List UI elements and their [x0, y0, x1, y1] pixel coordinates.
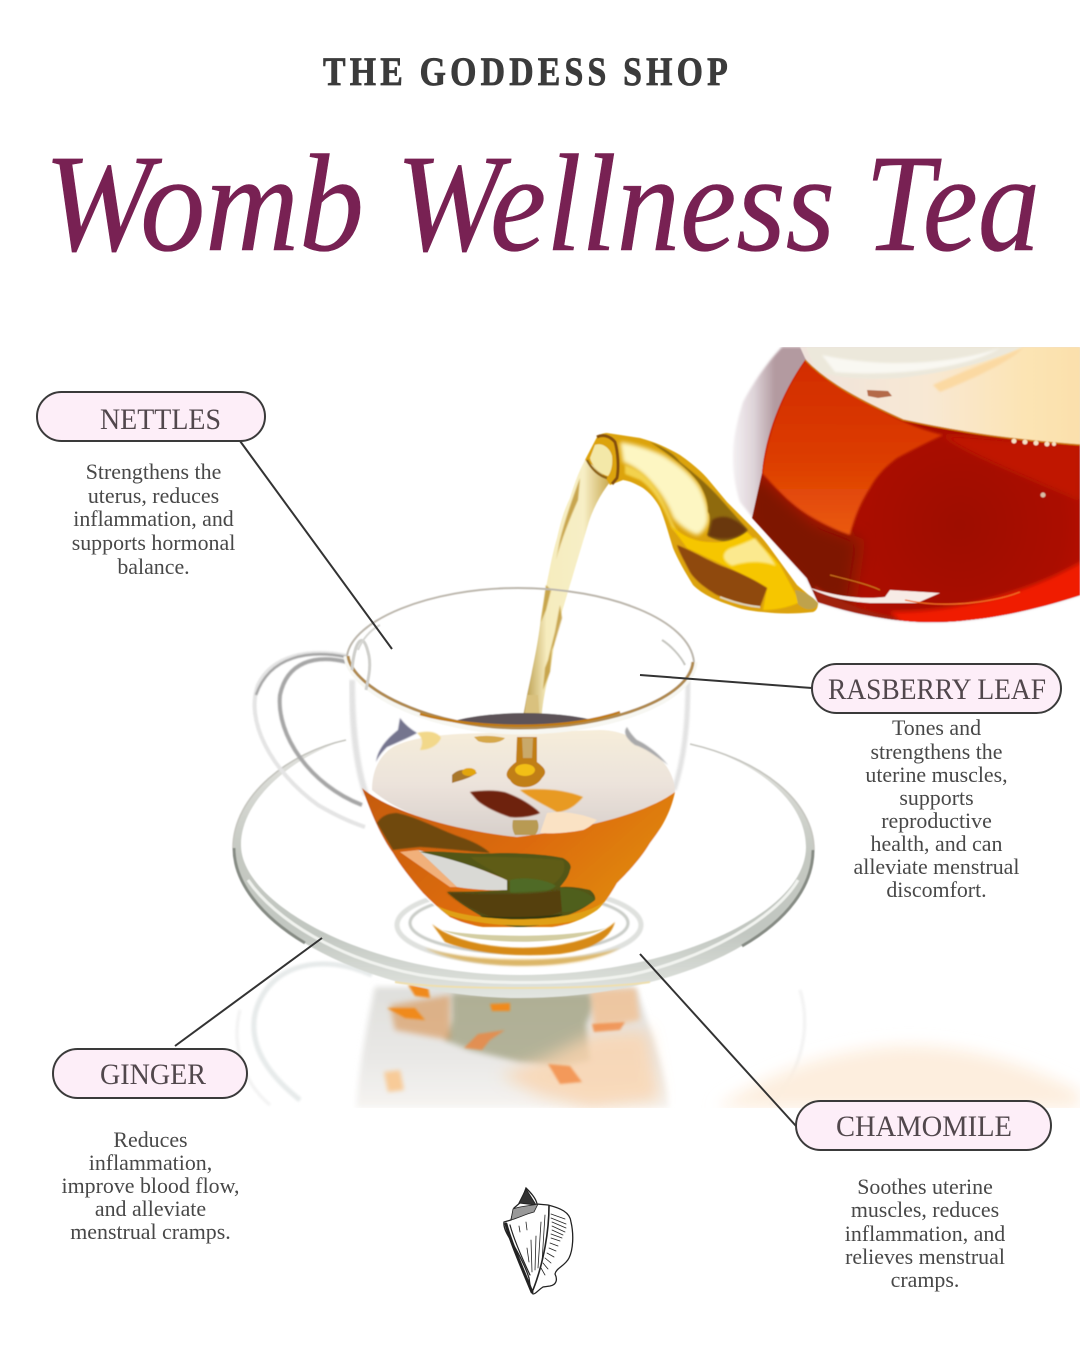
cup foot — [397, 887, 641, 966]
text: chamomile description: inflammation, and — [845, 1221, 1005, 1246]
label: nettles: NETTLES — [100, 403, 221, 436]
text: ginger description: inflammation, — [89, 1150, 212, 1175]
title: Wellness — [396, 127, 835, 281]
text: raspberry leaf description: strengthens the — [871, 739, 1002, 764]
amber foot of tea — [436, 898, 607, 926]
text: raspberry leaf description: discomfort. — [886, 877, 987, 902]
title — [44, 127, 1040, 281]
text: raspberry leaf description: supports — [899, 785, 974, 810]
label: raspberry leaf — [812, 664, 1061, 713]
connector: chamomile — [640, 954, 796, 1126]
orange strip and glare behind leaf — [400, 850, 457, 887]
text: nettles description: uterus, reduces — [88, 483, 219, 508]
connector: ginger — [175, 938, 322, 1046]
dark swirl and splash — [470, 791, 540, 817]
text: ginger description: Reduces — [113, 1127, 188, 1152]
connector: nettles — [240, 441, 392, 649]
mint leaf — [420, 852, 595, 927]
label: ginger — [53, 1049, 247, 1098]
text: ginger description: and alleviate — [95, 1196, 206, 1221]
text: raspberry leaf description: health, and can — [871, 831, 1002, 856]
text: nettles description: balance. — [117, 554, 190, 579]
text: chamomile description: muscles, reduces — [851, 1197, 999, 1222]
cup glass body — [350, 670, 692, 927]
text: raspberry leaf description: reproductive — [881, 808, 992, 833]
text: chamomile description: cramps. — [891, 1267, 959, 1292]
cup handle — [255, 653, 365, 827]
text: ginger description: improve blood flow, — [62, 1173, 239, 1198]
label: ginger: GINGER — [100, 1058, 206, 1091]
icon: conch shell — [504, 1188, 573, 1294]
teapot — [733, 347, 1080, 640]
text: nettles description: inflammation, and — [73, 506, 234, 531]
pouring stream — [507, 460, 610, 787]
saucer — [233, 740, 814, 998]
title: Womb — [44, 127, 364, 281]
label: chamomile — [796, 1101, 1051, 1150]
text: raspberry leaf description: uterine muscles, — [865, 762, 1008, 787]
label: nettles — [37, 392, 265, 441]
text: chamomile description: Soothes uterine — [857, 1174, 993, 1199]
label: raspberry leaf: RASBERRY LEAF — [828, 673, 1046, 706]
text: ginger description: menstrual cramps. — [70, 1219, 231, 1244]
cup rim — [347, 588, 694, 731]
reflection on table — [237, 964, 1080, 1108]
text: chamomile description: relieves menstrual — [845, 1244, 1005, 1269]
label: chamomile: CHAMOMILE — [836, 1110, 1012, 1143]
title: Tea — [865, 127, 1040, 281]
photo: tea pouring from glass teapot into cup — [233, 347, 1080, 1108]
teapot spout — [585, 433, 818, 614]
text: nettles description: supports hormonal — [72, 530, 235, 555]
water surface glints — [376, 718, 668, 783]
tea in cup — [355, 730, 685, 930]
connector: raspberry leaf — [640, 675, 812, 688]
brand heading: THE GODDESS SHOP — [323, 49, 732, 94]
text: nettles description: Strengthens the — [86, 459, 221, 484]
text: raspberry leaf description: alleviate menstrual — [854, 854, 1019, 879]
leaf, upper left — [377, 813, 490, 853]
text: raspberry leaf description: Tones and — [892, 715, 981, 740]
